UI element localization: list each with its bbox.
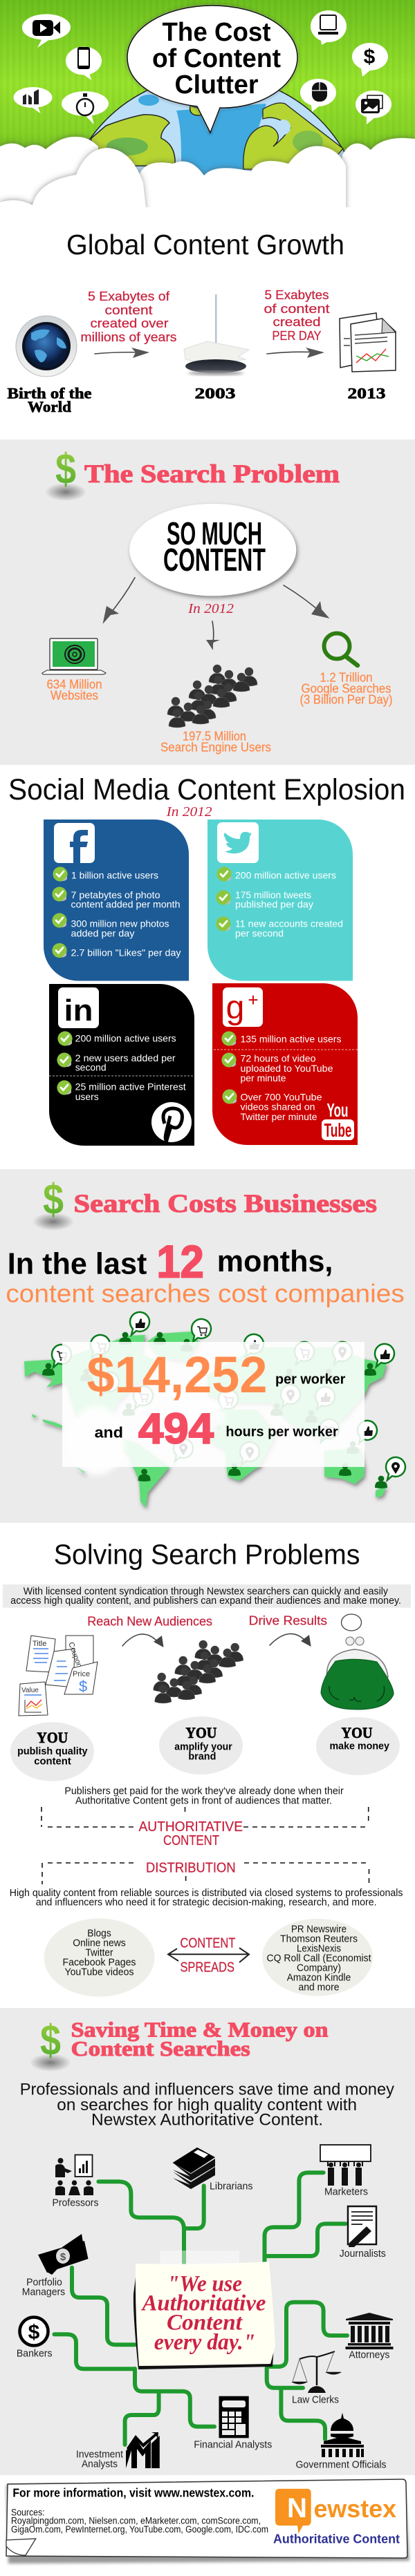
timeline labels: World bbox=[28, 398, 71, 415]
stat: hours per worker: and bbox=[95, 1424, 123, 1441]
text: publishers get paid bbox=[64, 1786, 344, 1806]
bubble: content channels: Blogs bbox=[87, 1928, 111, 1940]
icon: google plus: + bbox=[248, 989, 259, 1010]
content spreads arrow: CONTENT bbox=[180, 1935, 235, 1951]
header banner bbox=[0, 0, 415, 207]
bubble: publish quality content: YOU bbox=[37, 1729, 68, 1746]
panel: facebook bbox=[44, 820, 189, 981]
panel: linkedin and pinterest: 25 million active Pinterest bbox=[75, 1081, 186, 1092]
intro strip: access high quality content, and publishers can expand their audiences and make money. bbox=[10, 1595, 401, 1607]
arrow middle bbox=[206, 621, 220, 650]
label: search engine users bbox=[160, 730, 271, 755]
icon: publishing documents bbox=[19, 1636, 98, 1716]
title: The Cost bbox=[162, 18, 271, 47]
label: websites bbox=[47, 678, 102, 703]
stat: hours per worker: hours per worker bbox=[225, 1425, 338, 1440]
bracket: authoritative content bbox=[42, 1807, 369, 1848]
icon: youtube: You bbox=[326, 1099, 349, 1121]
network lines bbox=[54, 2172, 347, 2445]
stat: dollars per worker: $14,252 bbox=[87, 1346, 267, 1403]
icon: financial analysts bbox=[194, 2396, 272, 2451]
bubble: publish quality content: content bbox=[34, 1755, 71, 1767]
icon: attorneys: Attorneys bbox=[349, 2349, 389, 2361]
label: websites: 634 Million bbox=[47, 678, 102, 692]
arrow bbox=[270, 1633, 311, 1647]
section: saving time and money bbox=[17, 2017, 394, 2471]
bubble: make money bbox=[316, 1717, 400, 1775]
footer card bbox=[6, 2479, 409, 2564]
stat: dollars per worker: per worker bbox=[275, 1372, 346, 1388]
panel: google plus and youtube bbox=[212, 983, 358, 1145]
text: five exabytes over millions of years: 5 Exabytes of bbox=[88, 290, 170, 303]
bubble: amplify your brand: amplify your bbox=[174, 1741, 232, 1752]
panel: linkedin and pinterest: users bbox=[75, 1091, 99, 1102]
section: the search problem bbox=[42, 446, 392, 755]
world map bbox=[24, 1312, 405, 1508]
arrow left bbox=[102, 578, 135, 624]
sticky note quote: Authoritative bbox=[141, 2291, 266, 2315]
text: five exabytes per day: created bbox=[273, 315, 321, 329]
icon: marketers bbox=[320, 2145, 371, 2198]
title: Clutter bbox=[174, 70, 259, 100]
text: sources bbox=[11, 2508, 268, 2535]
icon: youtube bbox=[322, 1099, 354, 1141]
icon: laptop bubble bbox=[311, 10, 347, 45]
headline: content searches cost companies bbox=[6, 1279, 405, 1307]
text: sources: Sources: bbox=[11, 2508, 45, 2518]
icon: green purse bbox=[321, 1637, 394, 1710]
panel: twitter: 200 million active users bbox=[235, 869, 336, 880]
panel: linkedin and pinterest: 200 million active users bbox=[75, 1033, 176, 1044]
panel: linkedin and pinterest bbox=[49, 984, 194, 1146]
icon: law clerks: Law Clerks bbox=[292, 2394, 339, 2406]
heading bbox=[71, 2017, 328, 2061]
bubble: amplify your brand: YOU bbox=[185, 1724, 217, 1741]
heading: Solving Search Problems bbox=[54, 1539, 360, 1571]
icon: financial analysts: Financial Analysts bbox=[194, 2439, 272, 2451]
in 2012: In 2012 bbox=[166, 804, 212, 820]
timeline labels bbox=[7, 384, 386, 415]
bubble: content channels: Twitter bbox=[86, 1947, 113, 1959]
text: professionals and influencers: Professionals and influencers save time and money bbox=[20, 2081, 394, 2099]
timeline labels: 2003 bbox=[195, 384, 235, 402]
content spreads arrow bbox=[168, 1935, 249, 1975]
sticky note quote: Content bbox=[167, 2311, 243, 2336]
bubble: make money: YOU bbox=[342, 1724, 373, 1741]
heading: Content Searches bbox=[71, 2036, 250, 2061]
panel: facebook: content added per month bbox=[71, 898, 180, 909]
icon: laptop bbox=[42, 638, 106, 674]
label: search engine users: Search Engine Users bbox=[160, 741, 271, 755]
label: reach new audiences: Reach New Audiences bbox=[87, 1615, 212, 1629]
text: five exabytes per day: of content bbox=[264, 302, 329, 316]
icon: professors: Professors bbox=[53, 2197, 98, 2209]
panel: twitter: published per day bbox=[235, 898, 313, 909]
bubble: distribution partners: Thomson Reuters bbox=[280, 1933, 358, 1945]
icon: dollar bbox=[33, 1176, 74, 1231]
panel: google plus and youtube: uploaded to YouTube bbox=[241, 1063, 333, 1074]
icon: pinterest bbox=[151, 1102, 192, 1142]
bracket: distribution: DISTRIBUTION bbox=[146, 1861, 236, 1876]
in 2012: In 2012 bbox=[187, 601, 234, 616]
heading: global content growth: Global Content Growth bbox=[66, 229, 344, 261]
speech bubble: title bbox=[127, 6, 297, 133]
intro strip bbox=[3, 1584, 411, 1608]
bubble: distribution partners: PR Newswire bbox=[291, 1924, 347, 1935]
icon: stopwatch bubble bbox=[62, 91, 109, 124]
icon: chart bubble bbox=[14, 87, 53, 113]
icon: bankers bbox=[17, 2318, 53, 2360]
bubble: distribution partners: Company) bbox=[297, 1962, 341, 1974]
arrow bbox=[95, 348, 149, 358]
panel: linkedin and pinterest: second bbox=[75, 1062, 107, 1073]
title: of Content bbox=[152, 44, 281, 73]
bubble: publish quality content: publish quality bbox=[17, 1745, 88, 1757]
intro strip: With licensed content syndication through Newstex searchers can quickly and easily bbox=[24, 1586, 389, 1597]
text: five exabytes per day: PER DAY bbox=[273, 329, 321, 343]
bubble: publish quality content bbox=[10, 1722, 94, 1781]
sticky note quote bbox=[133, 2251, 275, 2369]
arrow bbox=[122, 1634, 163, 1647]
icon: crowd bbox=[167, 665, 257, 728]
icon: bankers: Bankers bbox=[17, 2348, 53, 2360]
panel: google plus and youtube: 135 million active users bbox=[241, 1034, 342, 1045]
timeline bbox=[7, 288, 396, 415]
icon: magnifier bbox=[324, 633, 358, 665]
panel: google plus and youtube: videos shared on bbox=[241, 1101, 315, 1112]
bubble: distribution partners: CQ Roll Call (Economist bbox=[267, 1953, 371, 1964]
stat: hours per worker: 494 bbox=[138, 1405, 214, 1452]
label: google searches bbox=[300, 671, 393, 707]
heading: The Search Problem bbox=[84, 460, 340, 489]
label: websites: Websites bbox=[50, 689, 98, 703]
arrow right bbox=[284, 585, 329, 618]
text: professionals and influencers bbox=[20, 2081, 394, 2130]
headline: 12 bbox=[156, 1235, 204, 1287]
text: high quality content: and influencers who need it for strategic decision-making, research, and more. bbox=[36, 1896, 377, 1908]
icon: earth bbox=[16, 316, 77, 377]
icon: government officials bbox=[296, 2413, 386, 2471]
label: drive results: Drive Results bbox=[249, 1614, 327, 1628]
icon: paper spike bbox=[184, 294, 249, 375]
bubble: content channels: YouTube videos bbox=[65, 1967, 134, 1978]
icon: journalists bbox=[340, 2206, 386, 2260]
title bbox=[152, 18, 281, 100]
icon: dollar: $ bbox=[43, 1176, 64, 1224]
logo: newstex: Authoritative Content bbox=[273, 2532, 400, 2546]
icon: video bubble bbox=[22, 14, 71, 48]
panel: twitter: per second bbox=[235, 928, 284, 939]
text: five exabytes over millions of years: content bbox=[105, 303, 152, 317]
text: more information: For more information, visit www.newstex.com. bbox=[12, 2485, 254, 2499]
bubble: distribution partners: and more bbox=[299, 1982, 339, 1993]
icon: professors bbox=[53, 2154, 98, 2209]
icon: coin bbox=[342, 1614, 361, 1631]
icon: documents bbox=[340, 313, 396, 372]
icon: google plus: g bbox=[226, 989, 244, 1026]
icon: journalists: Journalists bbox=[340, 2248, 386, 2260]
icon: publishing documents: Price bbox=[73, 1670, 90, 1678]
bracket: authoritative content: AUTHORITATIVE bbox=[138, 1819, 243, 1835]
label: google searches: (3 Billion Per Day) bbox=[300, 693, 393, 707]
icon: bankers: $ bbox=[28, 2321, 40, 2344]
icon: investment analysts: Investment bbox=[76, 2449, 124, 2461]
text: five exabytes over millions of years: created over bbox=[90, 316, 169, 330]
icon: dollar bbox=[45, 446, 86, 501]
bracket: authoritative content: CONTENT bbox=[163, 1833, 219, 1848]
page curl bbox=[6, 2539, 36, 2555]
section: social media bbox=[8, 773, 405, 1146]
icon: investment analysts bbox=[76, 2432, 160, 2470]
icon: dollar bbox=[30, 2017, 71, 2072]
ellipse: so much content: SO MUCH bbox=[167, 515, 262, 551]
icon: attorneys bbox=[346, 2313, 393, 2361]
text: sources: Royalpingdom.com, Nielsen.com, eMarketer.com, comScore.com, bbox=[11, 2516, 261, 2526]
panel: facebook: added per day bbox=[71, 928, 134, 939]
bubble: distribution partners: LexisNexis bbox=[297, 1943, 341, 1955]
text: publishers get paid: Authoritative Content gets in front of audiences that matter. bbox=[75, 1795, 332, 1806]
text: publishers get paid: Publishers get paid for the work they've already done when their bbox=[64, 1786, 344, 1797]
headline bbox=[6, 1235, 405, 1307]
icon: portfolio managers: Managers bbox=[22, 2286, 65, 2298]
icon: books and librarians bbox=[173, 2148, 253, 2192]
icon: linkedin: in bbox=[64, 994, 93, 1027]
text: high quality content bbox=[10, 1887, 403, 1908]
icon: publishing documents: $ bbox=[79, 1678, 87, 1695]
panel: facebook: 1 billion active users bbox=[71, 869, 158, 880]
logo: newstex: ewstex bbox=[314, 2494, 396, 2523]
label: google searches: 1.2 Trillion bbox=[320, 671, 372, 685]
panel: twitter: 175 million tweets bbox=[235, 889, 311, 900]
icon: dollar: $ bbox=[40, 2017, 61, 2065]
panel: facebook: 2.7 billion "Likes" per day bbox=[71, 947, 181, 958]
icon: publishing documents: Coupon bbox=[66, 1641, 84, 1669]
icon: google plus bbox=[223, 987, 263, 1027]
logo: newstex bbox=[273, 2489, 400, 2546]
text: five exabytes over millions of years bbox=[80, 290, 177, 344]
arrow bbox=[267, 348, 324, 358]
bracket: distribution bbox=[42, 1861, 369, 1884]
icon: portfolio managers: $ bbox=[60, 2251, 66, 2263]
panel: facebook: 7 petabytes of photo bbox=[71, 889, 160, 900]
logo: newstex: N bbox=[287, 2493, 307, 2523]
ellipse: so much content bbox=[129, 504, 296, 596]
heading: Saving Time & Money on bbox=[71, 2017, 328, 2041]
panel: twitter: 11 new accounts created bbox=[235, 918, 343, 929]
stat: hours per worker bbox=[95, 1405, 338, 1452]
panel: google plus and youtube: Over 700 YouTube bbox=[241, 1092, 322, 1103]
sticky note quote: every day." bbox=[154, 2330, 255, 2355]
headline: In the last bbox=[8, 1247, 147, 1280]
text: professionals and influencers: Newstex Authoritative Content. bbox=[91, 2111, 323, 2130]
text: five exabytes over millions of years: millions of years bbox=[80, 330, 177, 344]
text: sources: GigaOm.com, PewInternet.org, YouTube.com, Google.com, IDC.com bbox=[11, 2524, 268, 2535]
text: five exabytes per day bbox=[264, 288, 329, 343]
icon: photos bubble bbox=[356, 91, 391, 124]
icon: linkedin bbox=[58, 987, 99, 1028]
ellipse: so much content: CONTENT bbox=[163, 542, 266, 578]
icon: dollar: $ bbox=[55, 446, 76, 493]
icon: marketers: Marketers bbox=[324, 2186, 368, 2198]
icon: phone bubble bbox=[66, 47, 102, 80]
clouds bbox=[0, 137, 415, 242]
globe illustration bbox=[89, 90, 344, 176]
bubble: content channels bbox=[44, 1918, 155, 1997]
map pins bbox=[42, 1312, 405, 1488]
icon: investment analysts: Analysts bbox=[82, 2459, 118, 2470]
bubble: amplify your brand bbox=[159, 1716, 243, 1774]
bubble: make money: make money bbox=[329, 1740, 390, 1752]
panel: facebook: 300 million new photos bbox=[71, 918, 169, 929]
icon: publishing documents: Value bbox=[21, 1687, 39, 1694]
icon: portfolio managers: Portfolio bbox=[26, 2276, 62, 2288]
icon: dollar bubble bbox=[352, 43, 388, 77]
icon: books and librarians: Librarians bbox=[210, 2180, 253, 2192]
text: high quality content: High quality content from reliable sources is distributed via closed systems to professionals bbox=[10, 1887, 403, 1899]
icon: youtube: Tube bbox=[324, 1119, 351, 1141]
timeline labels: Birth of the bbox=[7, 384, 92, 402]
bubble: distribution partners: Amazon Kindle bbox=[287, 1972, 351, 1984]
panel: google plus and youtube: per minute bbox=[241, 1072, 286, 1083]
bubble: amplify your brand: brand bbox=[188, 1750, 216, 1762]
text: professionals and influencers: on searches for high quality content with bbox=[57, 2096, 357, 2114]
panel: google plus and youtube: 72 hours of video bbox=[241, 1053, 316, 1064]
icon: twitter bbox=[217, 822, 259, 863]
bubble: distribution partners bbox=[262, 1919, 373, 1996]
heading: Search Costs Businesses bbox=[73, 1190, 377, 1218]
icon: law clerks bbox=[291, 2351, 342, 2406]
bubble: content channels: Facebook Pages bbox=[62, 1957, 136, 1969]
label: search engine users: 197.5 Million bbox=[183, 730, 246, 744]
icon: dollar bubble: $ bbox=[364, 46, 376, 68]
content spreads arrow: SPREADS bbox=[180, 1960, 234, 1975]
timeline labels: 2013 bbox=[347, 384, 386, 402]
icon: government officials: Government Officials bbox=[296, 2459, 386, 2471]
icon: facebook bbox=[54, 823, 95, 863]
text: five exabytes per day: 5 Exabytes bbox=[264, 288, 329, 302]
sticky note quote: "We use bbox=[167, 2272, 242, 2297]
icon: crowd bbox=[154, 1640, 243, 1703]
panel: linkedin and pinterest: 2 new users added per bbox=[75, 1052, 176, 1063]
headline: months, bbox=[217, 1244, 333, 1278]
bubble: content channels: Online news bbox=[73, 1938, 126, 1949]
label: google searches: Google Searches bbox=[302, 682, 391, 696]
panel: google plus and youtube: Twitter per minute bbox=[241, 1111, 317, 1122]
section: solving search problems bbox=[3, 1539, 411, 1997]
section: search costs businesses bbox=[6, 1176, 405, 1508]
icon: portfolio managers bbox=[22, 2234, 89, 2298]
icon: mouse bubble bbox=[300, 79, 336, 112]
panel: twitter bbox=[208, 820, 353, 981]
icon: publishing documents: Title bbox=[33, 1640, 46, 1648]
